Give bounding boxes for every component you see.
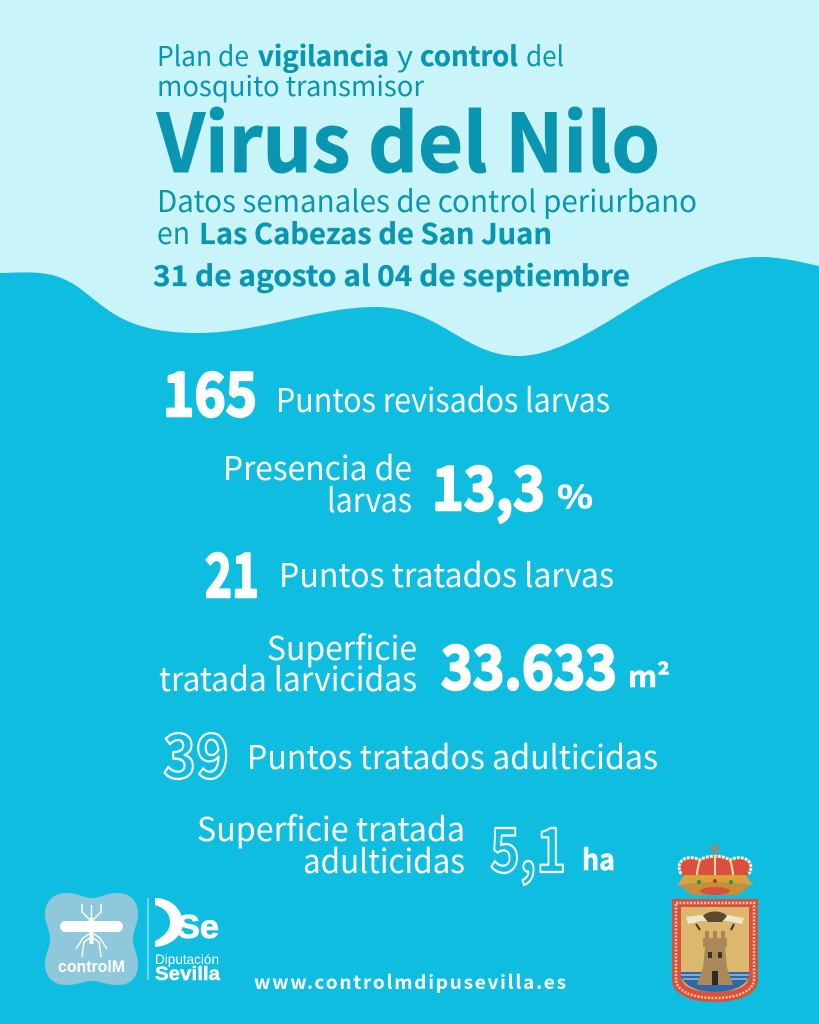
heading: plan subtitle: mosquito transmisor	[157, 64, 424, 104]
stat: superficie tratada adulticidas: Superficie tratada	[197, 803, 465, 851]
stat: presencia de larvas: larvas	[327, 474, 412, 522]
stat: presencia de larvas	[223, 441, 593, 528]
stat: puntos tratados larvas: 21	[205, 528, 259, 615]
heading: plan subtitle: del	[526, 34, 564, 74]
shield	[672, 899, 758, 1002]
heading: plan subtitle	[157, 34, 564, 104]
stat: superficie tratada larvicidas: tratada larvicidas	[159, 653, 417, 701]
stat: puntos revisados larvas	[163, 347, 610, 434]
stat: superficie tratada adulticidas: adulticidas	[303, 835, 465, 883]
stat: superficie tratada larvicidas	[159, 620, 670, 707]
logo: Diputación Sevilla: Sevilla	[155, 964, 220, 985]
stat: puntos tratados adulticidas: 39	[163, 707, 229, 796]
subtitle: weekly data location: en	[157, 209, 190, 253]
title: Virus del Nilo	[156, 80, 660, 196]
stat: superficie tratada larvicidas: 33.633	[441, 620, 617, 707]
divider line	[148, 898, 149, 980]
wave background panel	[0, 257, 819, 1024]
icon: coat of arms	[672, 844, 758, 1002]
website url: www.controlmdipusevilla.es	[254, 968, 566, 995]
stat: puntos revisados larvas: Puntos revisados larvas	[276, 374, 610, 422]
stat: superficie tratada larvicidas: m²	[628, 654, 670, 696]
stat: puntos tratados adulticidas	[163, 707, 658, 796]
crown	[677, 844, 753, 895]
stat: puntos tratados larvas	[205, 528, 614, 615]
stat: presencia de larvas: %	[557, 472, 593, 517]
subtitle: weekly data location	[157, 177, 697, 253]
logo: Diputación Sevilla	[155, 898, 220, 985]
logo: controlM: controlM	[58, 957, 125, 976]
subtitle: weekly data location: Datos semanales de control periurbano	[157, 177, 697, 221]
subtitle: weekly data location: Las Cabezas de San Juan	[199, 212, 552, 253]
stat: puntos revisados larvas: 165	[163, 347, 257, 434]
stat: superficie tratada adulticidas: ha	[582, 837, 615, 879]
stat: superficie tratada adulticidas: 5,1	[490, 801, 566, 890]
icon: mosquito	[60, 904, 123, 957]
logo: Diputación Sevilla: Diputación	[155, 951, 219, 967]
heading: plan subtitle: Plan de	[157, 34, 249, 74]
logo: controlM	[45, 893, 138, 985]
stat: puntos tratados larvas: Puntos tratados larvas	[279, 549, 614, 597]
stat: superficie tratada larvicidas: Superficie	[267, 622, 417, 670]
stat: superficie tratada adulticidas	[197, 801, 615, 890]
stat: presencia de larvas: 13,3	[432, 441, 545, 528]
heading: plan subtitle: control	[420, 34, 518, 74]
heading: plan subtitle: y	[397, 34, 413, 74]
heading: plan subtitle: vigilancia	[258, 34, 389, 74]
stat: puntos tratados adulticidas: Puntos tratados adulticidas	[247, 731, 658, 779]
stat: presencia de larvas: Presencia de	[223, 442, 412, 490]
date range: 31 de agosto al 04 de septiembre	[153, 254, 630, 295]
logo: Diputación Sevilla: Se	[177, 908, 219, 945]
